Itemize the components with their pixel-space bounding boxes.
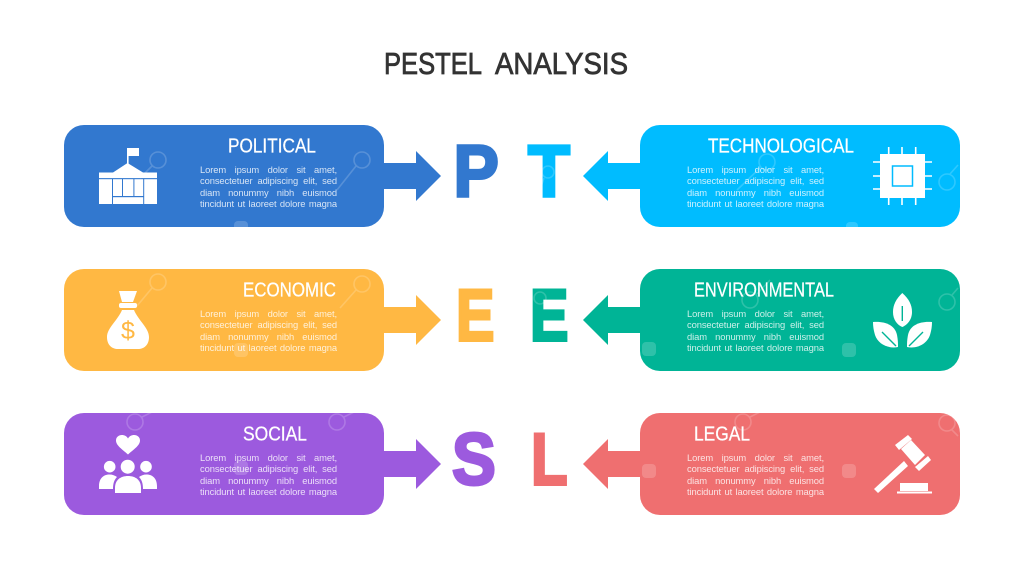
text block: technological <box>687 164 824 220</box>
text block: environmental <box>687 308 824 364</box>
text block: social: tincidunt ut laoreet dolore magna <box>200 486 337 497</box>
letter: P: P <box>454 130 499 212</box>
letter: L: L <box>531 420 568 501</box>
text block: technological: diam nonummy nibh euismod <box>687 187 824 198</box>
icon: gavel <box>874 435 932 494</box>
text block: technological: tincidunt ut laoreet dolore magna <box>687 198 824 209</box>
panel: economic <box>64 269 384 371</box>
text block: legal <box>687 452 824 508</box>
panel: social <box>64 413 384 515</box>
title: PESTEL <box>384 46 482 81</box>
text block: economic: diam nonummy nibh euismod <box>200 331 337 342</box>
icon: people with heart <box>99 435 157 493</box>
panel: environmental <box>640 269 960 371</box>
heading: political: POLITICAL <box>228 136 316 158</box>
text block: legal: tincidunt ut laoreet dolore magna <box>687 486 824 497</box>
text block: technological: consectetuer adipiscing elit, sed <box>687 175 824 186</box>
text block: legal: consectetuer adipiscing elit, sed <box>687 463 824 474</box>
text block: environmental: tincidunt ut laoreet dolore magna <box>687 342 824 353</box>
heading: environmental: ENVIRONMENTAL <box>694 280 834 302</box>
letter: S: S <box>452 418 496 500</box>
title: ANALYSIS <box>495 46 628 81</box>
text block: social: Lorem ipsum dolor sit amet, <box>200 452 337 463</box>
arrow: social <box>384 439 441 489</box>
text block: legal: Lorem ipsum dolor sit amet, <box>687 452 824 463</box>
arrow: economic <box>384 295 441 345</box>
icon: government building <box>99 148 157 204</box>
icon: microchip <box>873 147 932 205</box>
heading: social: SOCIAL <box>243 424 307 446</box>
icon: money bag: $ <box>121 317 135 345</box>
arrow: environmental <box>583 295 640 345</box>
text block: economic <box>200 308 337 364</box>
title <box>384 46 628 81</box>
letter: E amber: E <box>456 274 494 356</box>
panel: legal <box>640 413 960 515</box>
arrow: technological <box>583 151 640 201</box>
text block: political: tincidunt ut laoreet dolore magna <box>200 198 337 209</box>
text block: environmental: consectetuer adipiscing elit, sed <box>687 319 824 330</box>
panel: technological <box>640 125 960 227</box>
arrow: legal <box>583 439 640 489</box>
heading: legal: LEGAL <box>694 424 750 446</box>
panel: political <box>64 125 384 227</box>
icon: leaves <box>873 293 932 347</box>
icon: money bag <box>107 291 149 349</box>
text block: economic: consectetuer adipiscing elit, sed <box>200 319 337 330</box>
text block: economic: Lorem ipsum dolor sit amet, <box>200 308 337 319</box>
text block: environmental: Lorem ipsum dolor sit amet, <box>687 308 824 319</box>
text block: economic: tincidunt ut laoreet dolore magna <box>200 342 337 353</box>
text block: political: diam nonummy nibh euismod <box>200 187 337 198</box>
text block: political: consectetuer adipiscing elit, sed <box>200 175 337 186</box>
heading: economic: ECONOMIC <box>243 280 336 302</box>
text block: environmental: diam nonummy nibh euismod <box>687 331 824 342</box>
text block: social: diam nonummy nibh euismod <box>200 475 337 486</box>
letter: E teal: E <box>530 274 568 356</box>
text block: legal: diam nonummy nibh euismod <box>687 475 824 486</box>
text block: social: consectetuer adipiscing elit, sed <box>200 463 337 474</box>
heading: technological: TECHNOLOGICAL <box>708 136 854 158</box>
text block: technological: Lorem ipsum dolor sit amet, <box>687 164 824 175</box>
text block: political <box>200 164 337 220</box>
arrow: political <box>384 151 441 201</box>
letter: T: T <box>528 132 570 213</box>
text block: political: Lorem ipsum dolor sit amet, <box>200 164 337 175</box>
text block: social <box>200 452 337 508</box>
